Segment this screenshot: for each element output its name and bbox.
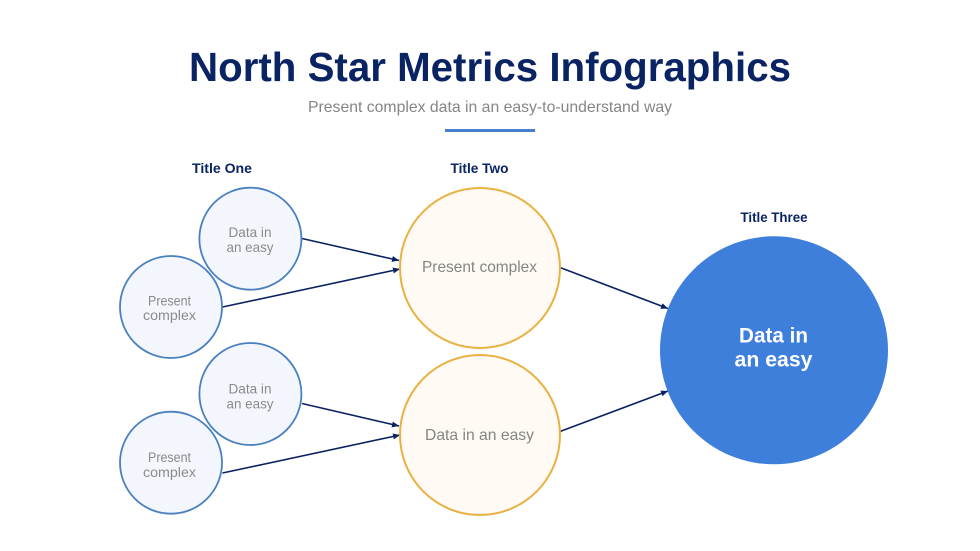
circle: result: Data in [739,324,808,348]
circle: result: an easy [734,348,813,372]
circle: bottom data in an easy [199,343,301,445]
circle: middle data in an easy: Data in an easy [425,427,534,444]
heading: title two: Title Two [450,160,508,176]
arrow: bottom circle two to data in an easy [222,435,400,473]
circle: top data in an easy: Data in [228,224,272,240]
circle: bottom present complex: complex [143,464,196,480]
circle: bottom data in an easy: Data in [228,381,272,397]
circle: top data in an easy [199,188,301,290]
circle: bottom present complex: Present [148,449,191,465]
title: North Star Metrics Infographics [189,44,791,90]
arrow: data in an easy to result [560,391,668,432]
circle: top data in an easy: an easy [226,239,274,255]
arrow: top circle one to present complex [302,238,399,260]
heading: title one: Title One [192,160,252,176]
title underline [445,129,535,132]
arrow: bottom circle one to data in an easy [302,404,399,426]
heading: title three: Title Three [740,209,808,225]
arrow: present complex to result [560,268,668,308]
circle: result [660,236,888,464]
subtitle: Present complex data in an easy-to-understand way [308,99,672,116]
circle: middle present complex: Present complex [422,259,537,276]
circle: bottom data in an easy: an easy [226,396,274,412]
circle: top present complex [120,256,222,358]
circle: middle present complex [400,188,560,348]
circle: bottom present complex [120,412,222,514]
circle: top present complex: complex [143,307,196,323]
arrow: top circle two to present complex [222,269,400,307]
circle: top present complex: Present [148,292,191,308]
circle: middle data in an easy [400,355,560,515]
